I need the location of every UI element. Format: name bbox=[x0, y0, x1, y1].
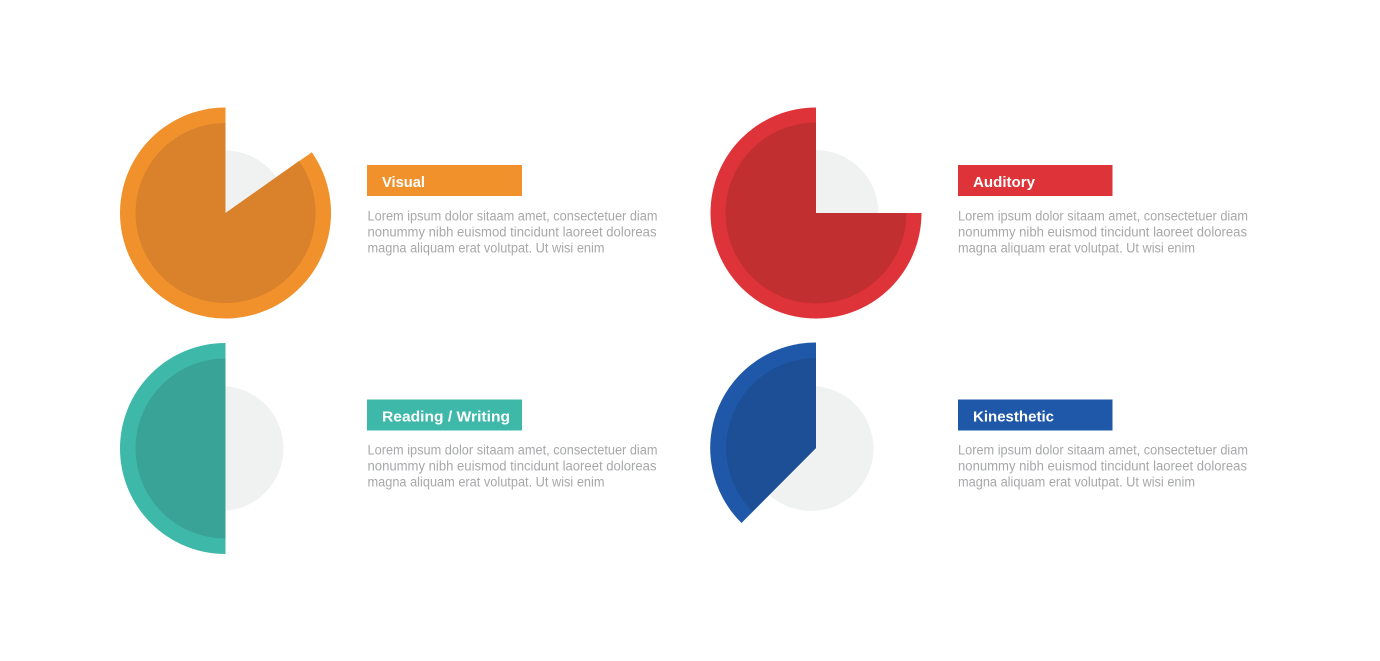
panel: visual bbox=[120, 108, 657, 318]
heading: reading / writing: Reading / Writing bbox=[382, 410, 510, 426]
text block: reading / writing: magna aliquam erat volutpat. Ut wisi enim bbox=[368, 474, 604, 490]
text block: auditory: Lorem ipsum dolor sitaam amet, consectetuer diam bbox=[958, 208, 1248, 224]
text block: auditory: magna aliquam erat volutpat. Ut wisi enim bbox=[958, 240, 1195, 256]
icon: auditory pie chart bbox=[710, 108, 922, 318]
text block: reading / writing bbox=[368, 442, 658, 490]
text block: auditory: nonummy nibh euismod tincidunt laoreet doloreas bbox=[958, 224, 1247, 240]
heading: visual bbox=[367, 165, 522, 196]
text block: reading / writing: Lorem ipsum dolor sitaam amet, consectetuer diam bbox=[368, 442, 658, 458]
panel: auditory bbox=[710, 108, 1248, 318]
text block: kinesthetic: magna aliquam erat volutpat. Ut wisi enim bbox=[958, 474, 1195, 490]
text block: kinesthetic bbox=[958, 442, 1248, 490]
text block: visual: magna aliquam erat volutpat. Ut wisi enim bbox=[368, 240, 604, 256]
heading: auditory bbox=[958, 165, 1112, 196]
icon: reading / writing pie chart bbox=[120, 343, 284, 554]
text block: visual bbox=[368, 208, 658, 256]
heading: visual: Visual bbox=[382, 175, 425, 191]
heading: reading / writing bbox=[367, 400, 522, 430]
panel: reading / writing bbox=[120, 343, 658, 554]
text block: visual: Lorem ipsum dolor sitaam amet, consectetuer diam bbox=[368, 208, 658, 224]
text block: reading / writing: nonummy nibh euismod tincidunt laoreet doloreas bbox=[368, 458, 657, 474]
text block: visual: nonummy nibh euismod tincidunt laoreet doloreas bbox=[368, 224, 657, 240]
text block: kinesthetic: Lorem ipsum dolor sitaam amet, consectetuer diam bbox=[958, 442, 1248, 458]
icon: kinesthetic pie chart bbox=[710, 342, 874, 523]
heading: kinesthetic: Kinesthetic bbox=[973, 410, 1054, 426]
text block: kinesthetic: nonummy nibh euismod tincidunt laoreet doloreas bbox=[958, 458, 1247, 474]
panel: kinesthetic bbox=[710, 342, 1248, 523]
icon: visual pie chart bbox=[120, 108, 331, 318]
heading: kinesthetic bbox=[958, 400, 1112, 430]
heading: auditory: Auditory bbox=[973, 175, 1035, 191]
text block: auditory bbox=[958, 208, 1248, 256]
